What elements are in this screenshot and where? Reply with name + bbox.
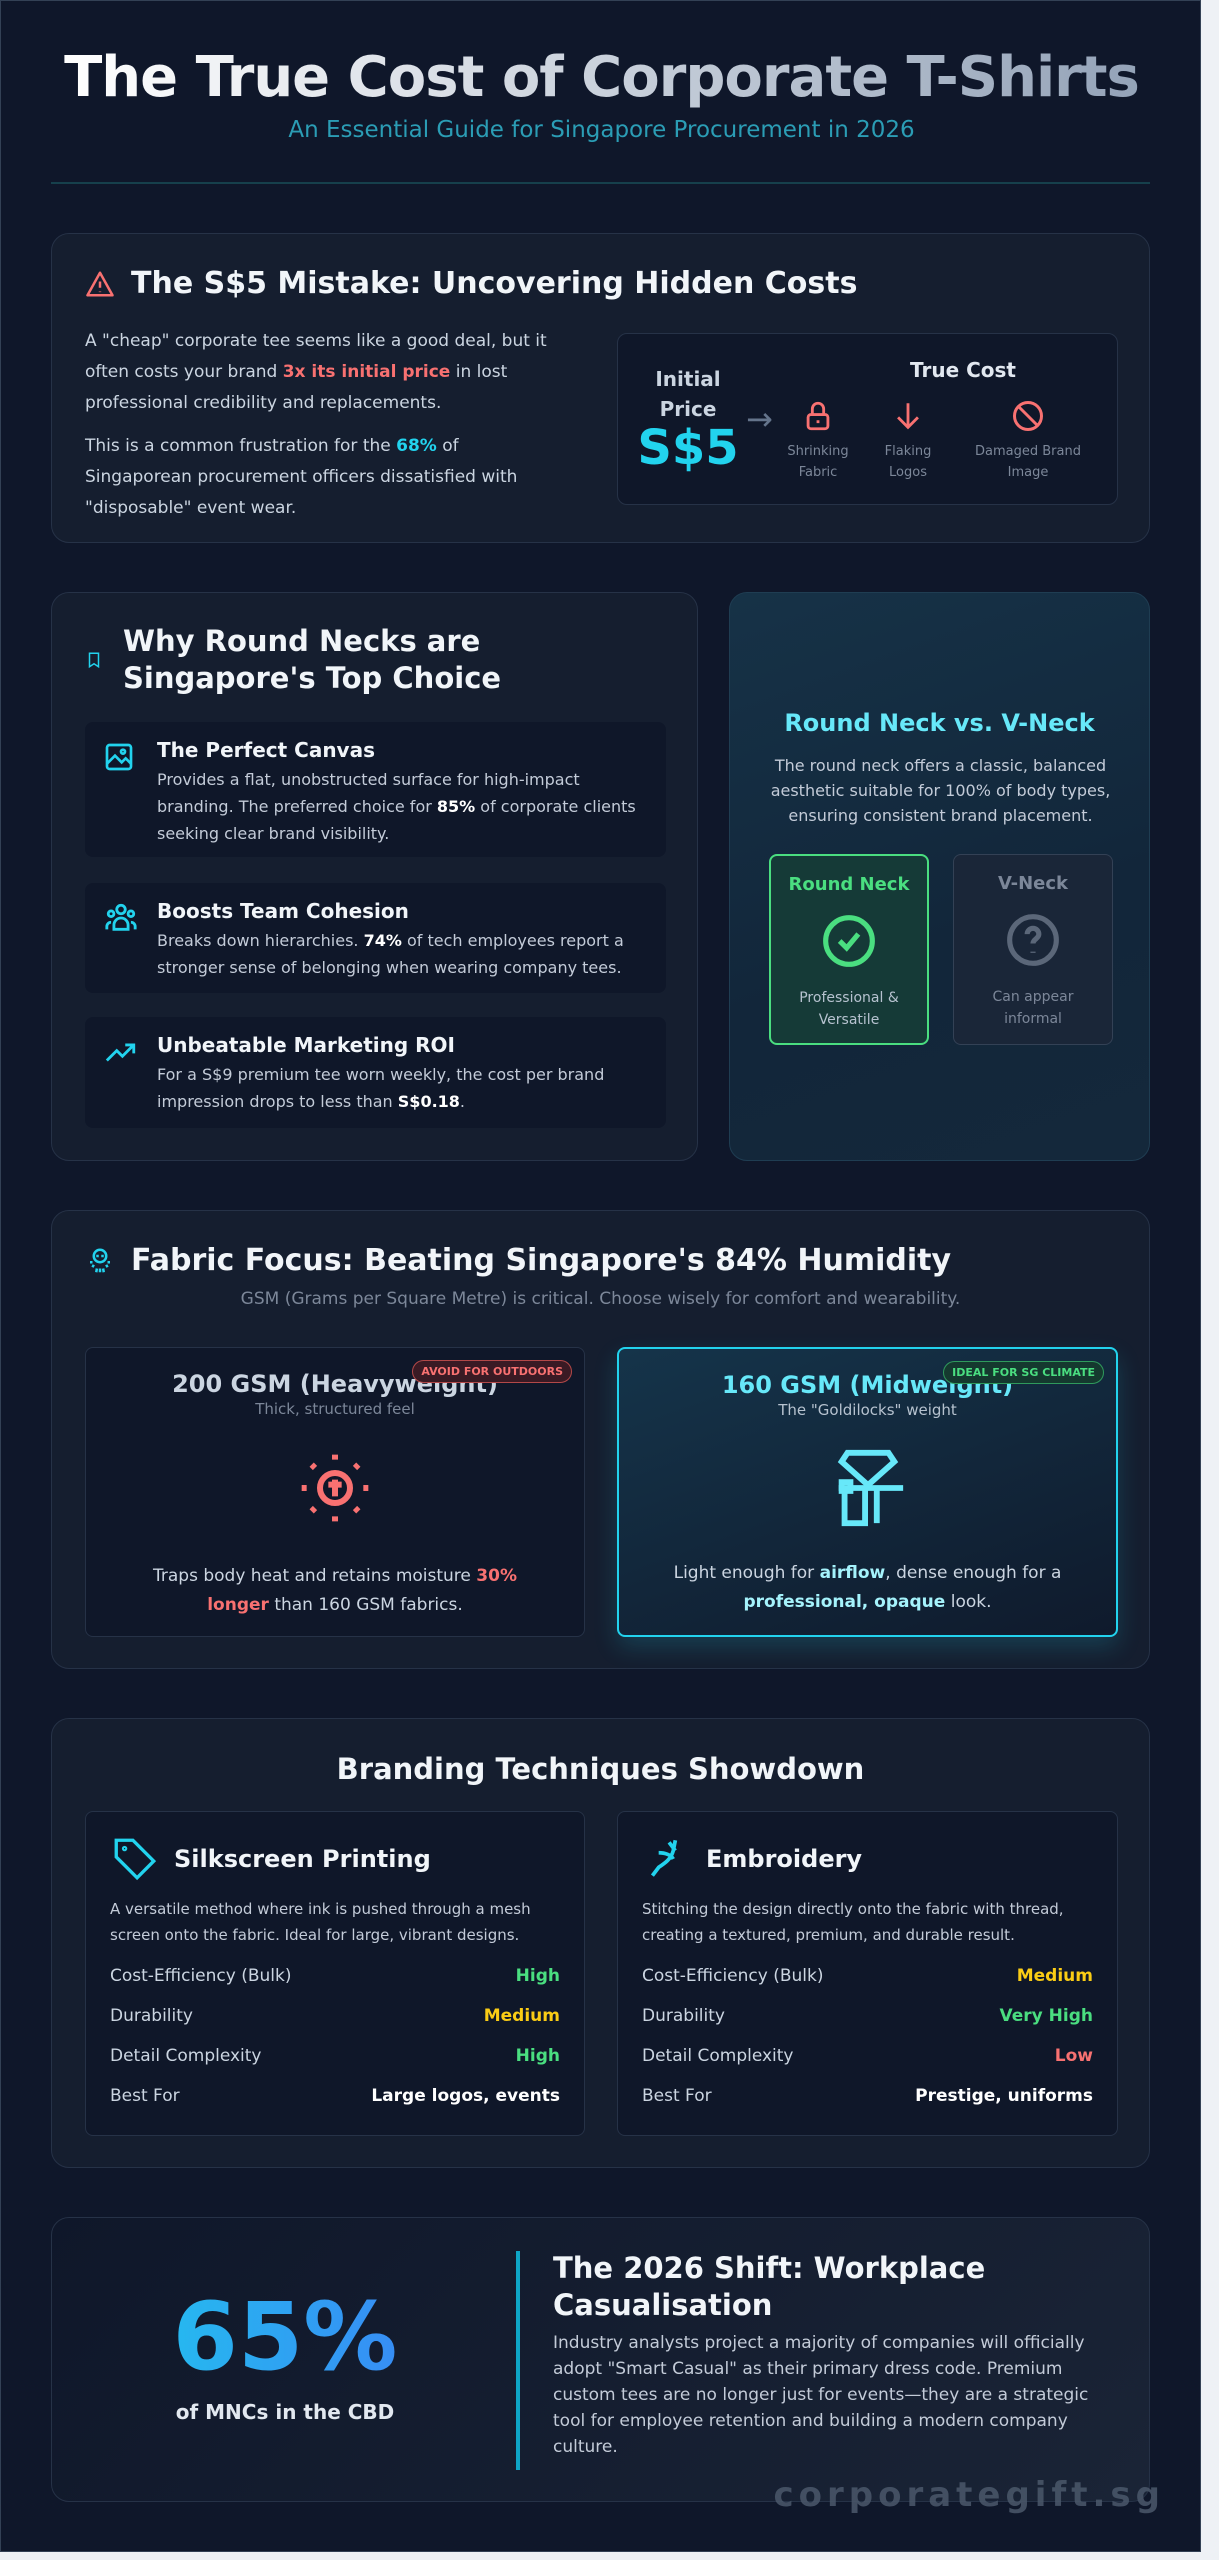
- icon: damaged brand: [975, 401, 1081, 480]
- panel: why round necks: [51, 592, 698, 1161]
- item: perfect canvas: [85, 722, 666, 857]
- card: 200 GSM: AVOID FOR OUTDOORS: [421, 1365, 563, 1378]
- card: 160 GSM: IDEAL FOR SG CLIMATE: [952, 1366, 1095, 1379]
- card: embroidery: Low: [1055, 2046, 1093, 2066]
- card: 200 GSM: 200 GSM (Heavyweight): [172, 1370, 498, 1398]
- title: The True Cost of Corporate T-Shirts: [64, 45, 1139, 110]
- card: silkscreen: Silkscreen Printing: [174, 1845, 431, 1873]
- item: marketing ROI: Unbeatable Marketing ROI: [157, 1033, 455, 1057]
- card: v-neck: informal: [1004, 1011, 1062, 1027]
- card: 160 GSM: Light enough for airflow, dense enough for a professional, opaque look.: [674, 1563, 1061, 1612]
- icon: damaged brand: Damaged Brand: [975, 444, 1081, 459]
- card: silkscreen: Medium: [484, 2006, 560, 2026]
- panel: S$5 mistake: [51, 233, 1150, 543]
- text: cheap tee: A "cheap" corporate tee seems like a good deal, but it often costs your brand 3x its initial price in lost professional credibility and replacements. This is a common frustration for the 68% of Singaporean procurement officers dissatisfied with "disposable" event wear.: [85, 331, 547, 518]
- card: v-neck: [953, 854, 1113, 1045]
- card: embroidery: Best For: [642, 2086, 712, 2106]
- item: marketing ROI: [85, 1017, 666, 1128]
- card: embroidery: Detail Complexity: [642, 2046, 794, 2066]
- subtitle: GSM (Grams per Square Metre) is critical. Choose wisely for comfort and wearability.: [241, 1289, 960, 1309]
- card: silkscreen: High: [516, 2046, 560, 2066]
- icon: flaking logos: Flaking: [885, 444, 931, 459]
- icon: shrinking fabric: Shrinking: [787, 444, 849, 459]
- card: round neck: [769, 854, 929, 1045]
- initial price: Price: [660, 397, 716, 421]
- card: 160 GSM: 160 GSM (Midweight): [722, 1371, 1013, 1399]
- card: 200 GSM: [85, 1347, 585, 1637]
- card: embroidery: [617, 1811, 1118, 2136]
- heading: Why Round Necks are: [123, 624, 480, 658]
- icon: damaged brand: Image: [1008, 465, 1048, 480]
- initial price: Initial: [655, 367, 721, 391]
- item: perfect canvas: The Perfect Canvas: [157, 738, 375, 762]
- card: silkscreen: Cost-Efficiency (Bulk): [110, 1966, 292, 1986]
- card: embroidery: Cost-Efficiency (Bulk): [642, 1966, 824, 1986]
- card: silkscreen: Detail Complexity: [110, 2046, 262, 2066]
- card: silkscreen: Durability: [110, 2006, 193, 2026]
- card: embroidery: Prestige, uniforms: [915, 2086, 1093, 2106]
- card: silkscreen: A versatile method where ink is pushed through a mesh screen onto the fabric. Ideal for large, vibrant designs.: [110, 1900, 531, 1944]
- card: embroidery: Medium: [1017, 1966, 1093, 1986]
- card: silkscreen: Best For: [110, 2086, 180, 2106]
- card: silkscreen: [85, 1811, 585, 2136]
- true cost: True Cost: [910, 358, 1016, 382]
- text: 2026 shift: [553, 2251, 1088, 2457]
- text: 2026 shift: Industry analysts project a majority of companies will officially adopt "Smart Casual" as their primary dress code. Premium custom tees are no longer just for events—they are a strategic tool for employee retention and building a modern company culture.: [553, 2333, 1088, 2457]
- card: 160 GSM: [617, 1347, 1118, 1637]
- initial price: [655, 367, 721, 421]
- card: silkscreen: High: [516, 1966, 560, 1986]
- heading: S$5 mistake: The S$5 Mistake: Uncovering Hidden Costs: [131, 266, 857, 301]
- item: team cohesion: Breaks down hierarchies. 74% of tech employees report a stronger sense of belonging when wearing company tees.: [157, 931, 624, 977]
- card: round neck: Round Neck: [789, 874, 909, 895]
- heading: [88, 624, 501, 695]
- item: marketing ROI: For a S$9 premium tee worn weekly, the cost per brand impression drops to less than S$0.18.: [157, 1065, 604, 1111]
- watermark: corporategift.sg: [773, 2475, 1165, 2515]
- panel: round neck vs v-neck: [729, 592, 1150, 1161]
- icon: flaking logos: [885, 403, 931, 480]
- panel: fabric focus: [51, 1210, 1150, 1669]
- heading: Branding Techniques Showdown: [337, 1752, 864, 1786]
- subtitle: An Essential Guide for Singapore Procurement in 2026: [288, 117, 915, 143]
- card: v-neck: Can appear: [992, 989, 1073, 1005]
- icon: flaking logos: Logos: [889, 465, 927, 480]
- item: team cohesion: [85, 883, 666, 993]
- card: v-neck: V-Neck: [998, 873, 1068, 894]
- item: perfect canvas: Provides a flat, unobstructed surface for high-impact branding. The preferred choice for 85% of corporate clients seeking clear brand visibility.: [157, 770, 636, 843]
- stat: 65%: of MNCs in the CBD: [176, 2400, 394, 2424]
- heading: Round Neck vs. V-Neck: [784, 709, 1095, 737]
- card: silkscreen: Large logos, events: [371, 2086, 560, 2106]
- card: round neck: Versatile: [819, 1012, 879, 1028]
- icon: shrinking fabric: [787, 402, 849, 480]
- panel: 2026 shift: [51, 2217, 1150, 2502]
- panel: branding techniques: [51, 1718, 1150, 2168]
- card: round neck: Professional &: [799, 990, 899, 1006]
- heading: Fabric Focus: Beating Singapore's 84% Humidity: [131, 1243, 951, 1278]
- text: 2026 shift: The 2026 Shift: Workplace Casualisation: [553, 2251, 985, 2322]
- card: embroidery: Very High: [1000, 2006, 1093, 2026]
- card: 200 GSM: Thick, structured feel: [255, 1400, 415, 1418]
- cost comparison box: S$5: [637, 420, 739, 476]
- card: 160 GSM: The "Goldilocks" weight: [778, 1401, 957, 1419]
- stat: 65%: 65%: [172, 2283, 398, 2392]
- item: team cohesion: Boosts Team Cohesion: [157, 899, 409, 923]
- card: 200 GSM: Traps body heat and retains moisture 30% longer than 160 GSM fabrics.: [153, 1566, 517, 1615]
- icon: warning: [86, 272, 114, 296]
- cost comparison box: [617, 333, 1118, 505]
- card: embroidery: Durability: [642, 2006, 725, 2026]
- card: embroidery: Stitching the design directly onto the fabric with thread, creating a textured, premium, and durable result.: [642, 1900, 1064, 1944]
- description: The round neck offers a classic, balanced aesthetic suitable for 100% of body types, ensuring consistent brand placement.: [771, 756, 1110, 825]
- heading: Singapore's Top Choice: [123, 661, 501, 695]
- arrow: →: [746, 400, 773, 438]
- card: embroidery: Embroidery: [706, 1845, 862, 1873]
- icon: shrinking fabric: Fabric: [799, 465, 837, 480]
